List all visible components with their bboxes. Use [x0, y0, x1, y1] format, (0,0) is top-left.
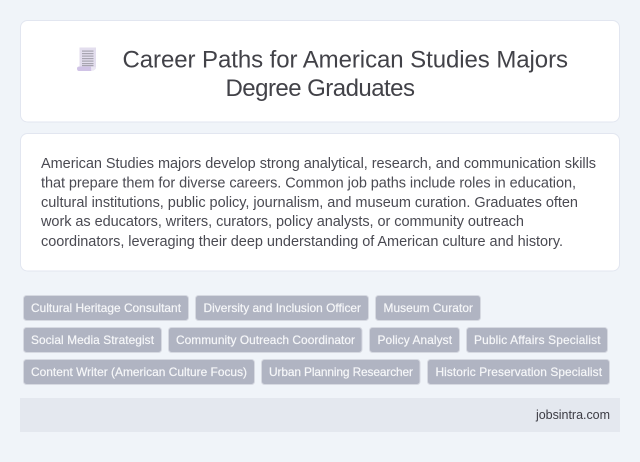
- tag: Urban Planning Researcher: [262, 360, 420, 384]
- tag: Content Writer (American Culture Focus): Content Writer (American Culture Focus): [31, 365, 247, 379]
- tag: Historic Preservation Specialist: Historic Preservation Specialist: [436, 365, 603, 379]
- tag: Policy Analyst: [370, 328, 460, 352]
- tags: career paths: [24, 296, 610, 384]
- tag: Cultural Heritage Consultant: [24, 296, 188, 320]
- text block: description paragraph: that prepare them for diverse careers. Common job paths include roles in education,: [41, 176, 576, 192]
- text block: description paragraph: coordinators, leveraging their deep understanding of American culture and history.: [41, 234, 563, 250]
- tag: Diversity and Inclusion Officer: Diversity and Inclusion Officer: [204, 301, 361, 315]
- footer: [20, 398, 620, 432]
- text block: description paragraph: cultural institutions, public policy, journalism, and museum curation. Graduates often: [41, 195, 578, 211]
- tag: Diversity and Inclusion Officer: [196, 296, 368, 320]
- tag: Museum Curator: [376, 296, 480, 320]
- footer text: site name: jobsintra.com: [535, 408, 610, 422]
- tag: Social Media Strategist: [24, 328, 162, 352]
- title: [122, 46, 568, 102]
- panel: title card: [20, 20, 620, 122]
- tag: Museum Curator: Museum Curator: [384, 301, 473, 315]
- tag: Cultural Heritage Consultant: Cultural Heritage Consultant: [31, 301, 182, 315]
- icon: scroll document: [77, 48, 96, 71]
- tag: Community Outreach Coordinator: [168, 328, 362, 352]
- tag: Public Affairs Specialist: Public Affairs Specialist: [474, 333, 601, 347]
- tag: Historic Preservation Specialist: [428, 360, 610, 384]
- tag: Urban Planning Researcher: Urban Planning Researcher: [269, 365, 413, 379]
- text block: description paragraph: American Studies majors develop strong analytical, research, and communication skills: [41, 156, 596, 172]
- text block: description paragraph: work as educators, writers, curators, policy analysts, or community outreach: [40, 214, 524, 230]
- title: Career Paths for American Studies Majors: [122, 46, 568, 74]
- panel: description: [20, 134, 620, 271]
- tag: Social Media Strategist: Social Media Strategist: [31, 333, 155, 347]
- tag: Community Outreach Coordinator: Community Outreach Coordinator: [176, 333, 355, 347]
- text block: description paragraph: [40, 156, 596, 250]
- tag: Content Writer (American Culture Focus): [24, 360, 254, 384]
- tag: Policy Analyst: Policy Analyst: [378, 333, 453, 347]
- title: Degree Graduates: [226, 75, 415, 102]
- tag: Public Affairs Specialist: [466, 328, 608, 352]
